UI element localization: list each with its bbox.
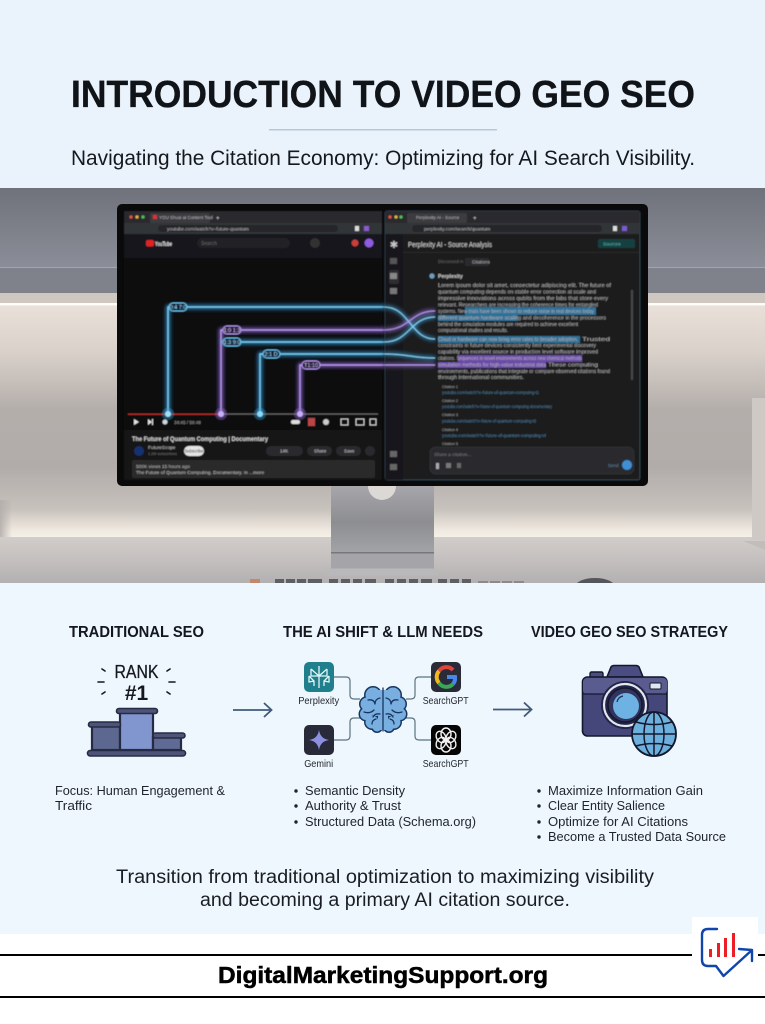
timestamp labels: 1:0 1:3 <box>224 328 240 334</box>
sources filter row: Discussed in <box>438 259 464 264</box>
message input: Send <box>608 463 619 468</box>
channel row: Save <box>344 448 355 454</box>
bullet list: Authority & Trust <box>305 798 401 813</box>
description: Focus: Human Engagement & <box>55 783 225 798</box>
description box: 500K views 15 hours ago <box>136 464 190 470</box>
answer text: relevant. Researchers are increasing the coherence times for entangled <box>438 302 598 308</box>
channel row: 14K <box>280 448 289 454</box>
channel row: 1.2M subscribers <box>148 452 177 456</box>
upper wall <box>0 188 765 268</box>
icon: Perplexity <box>298 662 340 707</box>
answer text: environments, publications that integrate or compare observed citations found <box>438 369 610 375</box>
timestamp labels: 0:4 7:0 <box>170 305 186 311</box>
video title: The Future of Quantum Computing | Documentary <box>132 436 268 443</box>
citations list: youtube.com/watch?v=future-of-quantum-computing-documentary <box>442 404 553 409</box>
bullet list <box>537 783 726 844</box>
right address bar: perplexity.com/search/quantum <box>424 226 490 232</box>
timestamp labels: 2:1 D <box>264 352 278 358</box>
icon: rank podium: RANK <box>114 662 158 682</box>
answer text: systems. New trials have been shown to reduce noise in real devices today <box>438 309 594 315</box>
citations list: youtube.com/watch?v=future-of-quantum-computing-t1 <box>442 390 539 395</box>
citations list: youtube.com/watch?v=future-of-quantum-computing-t3 <box>442 418 536 424</box>
video timeline <box>128 408 378 420</box>
answer text: computational studies and results. <box>438 328 508 334</box>
neon connector lines <box>168 307 384 414</box>
answer text: Cloud or hardware can now bring error rates to broader adoption. <box>438 337 578 343</box>
monitor stand <box>327 472 438 576</box>
answer heading <box>429 273 463 280</box>
citations list: Citation 4 <box>442 428 458 432</box>
bullet list: Structured Data (Schema.org) <box>305 814 476 829</box>
hero image: desk setup with monitor <box>0 188 765 596</box>
answer text: through international communities. <box>438 375 524 381</box>
answer text: citations. Sequences in novel environments across new chemical methods <box>438 356 582 362</box>
monitor bezel <box>117 204 648 486</box>
youtube header: Search <box>201 241 217 247</box>
channel row <box>134 445 375 456</box>
right tab bar: Perplexity AI - Source <box>416 215 460 220</box>
scrollbar <box>631 290 633 380</box>
title: INTRODUCTION TO VIDEO GEO SEO <box>71 74 695 116</box>
shelf light strip <box>0 303 765 305</box>
heading: THE AI SHIFT & LLM NEEDS <box>283 624 483 641</box>
icon: camera with globe <box>582 666 676 756</box>
timestamp labels <box>169 303 320 369</box>
below video panel <box>124 430 382 480</box>
answer heading: Perplexity <box>438 274 463 280</box>
browser tab bar: + <box>216 216 220 222</box>
neon connector lines: glow <box>168 307 384 414</box>
arrow: traditional to AI shift <box>233 703 272 717</box>
icon: ChatGPT <box>423 725 469 770</box>
subtitle: Navigating the Citation Economy: Optimizing for AI Search Visibility. <box>71 147 695 170</box>
citations list: Citation 2 <box>442 399 458 403</box>
browser tab bar: YOU Shuai ai Content Tool <box>159 215 213 220</box>
column: AI shift and LLM needs <box>283 624 483 829</box>
connector lines <box>334 677 431 740</box>
timestamp labels: 1:3 9:0 <box>224 340 240 346</box>
answer text: impressive innovations across qubits from the labs that store every <box>438 296 609 302</box>
answer text: Trusted <box>582 337 610 343</box>
pane heading: Perplexity AI - Source Analysis <box>408 240 492 249</box>
player controls <box>134 418 376 426</box>
youtube header <box>124 234 382 258</box>
description <box>55 783 225 813</box>
desk surface <box>0 537 765 583</box>
citations list: Citation 1 <box>442 385 458 389</box>
answer text: behind the simulation modules are required to achieve excellent <box>438 322 579 328</box>
icon: rank podium: #1 <box>125 682 148 705</box>
title divider <box>269 129 497 130</box>
converging connector curves <box>384 307 435 365</box>
app sidebar: ✱ <box>390 240 398 251</box>
icon: Google: SearchGPT <box>423 695 469 707</box>
keyboard <box>250 579 524 583</box>
column: video GEO SEO strategy <box>531 624 729 844</box>
header rule <box>403 251 640 254</box>
player controls: 34:45 / 58:48 <box>174 420 201 425</box>
citations list: Citation 5 <box>442 442 458 446</box>
answer text: constraints in future devices consistently limit experimental discovery <box>438 343 597 349</box>
left edge shade <box>0 500 12 537</box>
citations list: Citation 3 <box>442 413 458 417</box>
icon: Gemini <box>304 725 334 770</box>
converging connector curves: glow <box>384 307 435 365</box>
browser address bar: youtube.com/watch?v=future-quantum <box>167 226 249 232</box>
right address bar <box>385 223 640 234</box>
answer text <box>438 283 612 381</box>
bullet list: Optimize for AI Citations <box>548 814 688 829</box>
app sidebar <box>385 234 403 480</box>
lower wall with glow <box>0 305 765 537</box>
arrow: AI shift to strategy <box>493 702 532 716</box>
browser tab bar <box>124 211 382 223</box>
answer text: different quantum hardware scaling and decoherence in the processors <box>438 316 607 322</box>
icon: Perplexity: Perplexity <box>298 695 340 707</box>
answer text: These computing <box>548 362 598 368</box>
answer text: Lorem ipsum dolor sit amet, consectetur adipiscing elit. The future of <box>438 283 612 289</box>
footer <box>0 917 765 1024</box>
right tab bar: + <box>473 216 477 222</box>
browser address bar <box>124 223 382 234</box>
icon: Google <box>423 662 469 707</box>
right tab bar <box>385 211 640 223</box>
mouse <box>575 578 615 596</box>
logo <box>692 917 758 985</box>
description box <box>132 460 375 478</box>
bullet list: Become a Trusted Data Source <box>548 829 726 844</box>
message input <box>430 447 634 474</box>
answer text: simulation methods for high-value industrial data <box>438 362 546 368</box>
column: traditional SEO <box>55 624 225 813</box>
sources button <box>598 239 635 248</box>
message input: Share a citation... <box>434 452 471 458</box>
bullet list: Clear Entity Salience <box>548 798 665 813</box>
right browser: AI source analysis <box>384 211 640 480</box>
icon: brain <box>360 688 406 732</box>
citations list <box>442 385 553 446</box>
description: Traffic <box>55 799 92 813</box>
channel row: Subscribe <box>185 448 204 454</box>
bullet list: Semantic Density <box>305 783 405 798</box>
description box: The Future of Quantum Computing, Documentary. In ...more <box>136 470 264 476</box>
answer text: capability via excellent source in production level software improved <box>438 350 598 356</box>
left browser: video player <box>124 211 384 480</box>
right wall object <box>743 398 765 550</box>
icon: rank podium <box>88 662 186 756</box>
shelf fascia <box>0 267 765 304</box>
heading: TRADITIONAL SEO <box>69 624 204 641</box>
sources filter row: Citations <box>472 260 491 264</box>
summary statement: and becoming a primary AI citation source. <box>200 890 570 911</box>
highlights <box>438 307 596 368</box>
monitor <box>117 204 648 486</box>
bullet list: Maximize Information Gain <box>548 783 703 798</box>
youtube header: YouTube <box>155 241 172 248</box>
lower content background <box>0 583 765 934</box>
timestamp labels: T1:10 <box>304 363 318 369</box>
channel row: Share <box>314 448 327 454</box>
answer text: quantum computing depends on stable error correction at scale and <box>438 290 596 296</box>
icon: Gemini: Gemini <box>304 758 333 770</box>
summary statement <box>116 867 655 911</box>
channel row: FutureScope <box>148 445 176 451</box>
sources button: Sources <box>603 242 621 248</box>
citations list: youtube.com/watch?v=future-of-quantum-computing-t4 <box>442 433 547 438</box>
icon: ChatGPT: SearchGPT <box>423 758 469 770</box>
footer brand text: DigitalMarketingSupport.org <box>218 962 548 988</box>
sources filter row <box>438 258 491 266</box>
heading: VIDEO GEO SEO STRATEGY <box>531 624 729 641</box>
bullet list <box>294 783 476 829</box>
summary statement: Transition from traditional optimization to maximizing visibility <box>116 867 655 888</box>
